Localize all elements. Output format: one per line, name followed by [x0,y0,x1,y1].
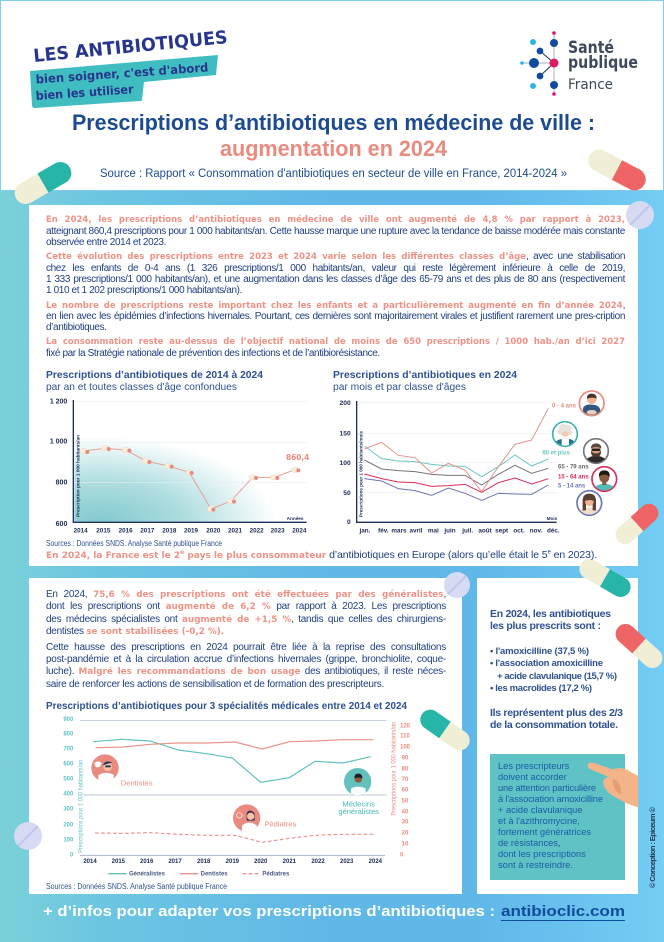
line chart: prescriptions per year: 2016 [119,527,133,534]
line chart: prescriptions by specialty: Pédiatres [262,872,290,878]
line chart: monthly prescriptions by age class: 0 [347,519,351,526]
line chart: prescriptions by specialty: 2021 [283,859,297,865]
chart title: three specialties: Prescriptions d’antibiotiques pour 3 spécialités médicales entre 2014 et 2024 [46,700,407,712]
line chart: prescriptions by specialty: 700 [63,747,74,753]
line chart: prescriptions by specialty: 30 [402,820,409,826]
panel: key figures and charts [29,205,638,566]
pill: sidebar teal [576,555,634,601]
avatar: general practitioner [344,768,371,797]
line chart: prescriptions per year: 600 [56,521,67,528]
line chart: monthly prescriptions by age class: mars [391,527,407,534]
campaign logo: les antibiotiques [30,27,229,108]
line chart: prescriptions by specialty: 800 [63,732,74,738]
line chart: monthly prescriptions by age class: 0 - 4 ans [552,404,577,410]
callout text: de résistances, [498,838,561,848]
icon: pointing hand [588,762,638,807]
line chart: prescriptions by specialty: 0 [70,853,74,859]
text block: key findings: En 2024, les prescriptions d’antibiotiques en médecine de ville ont augmenté de 4,8 % par rapport à 2023, [46,215,625,225]
avatar: pediatrician [233,804,260,833]
sidebar heading: les plus prescrits sont : [490,620,601,632]
line chart: monthly prescriptions by age class: nov. [530,527,543,534]
text block: key findings: observée entre 2014 et 2023. [46,237,166,248]
callout text: une attention particulière [498,783,596,793]
avatar: child 0-4 [579,391,604,417]
line chart: monthly prescriptions by age class: 50 [343,490,351,497]
line chart: prescriptions by specialty: 600 [63,762,74,768]
line chart: monthly prescriptions by age class: 200 [340,400,351,407]
line chart: prescriptions by specialty: 2018 [197,859,211,865]
line chart: prescriptions by specialty: 50 [402,799,409,805]
line chart: prescriptions by specialty: 2017 [168,859,182,865]
avatar: girl 5-14 [577,491,602,516]
line chart: prescriptions per year: Prescription pour 1 000 habitants/an [76,435,82,517]
callout text: à l'association amoxicilline [498,794,603,804]
campaign logo: les antibiotiques: LES ANTIBIOTIQUES [32,27,229,67]
line chart: monthly prescriptions by age class: oct. [513,527,525,534]
line chart: prescriptions by specialty: 100 [63,837,74,843]
line chart: prescriptions by specialty: 500 [63,777,74,783]
line chart: prescriptions by specialty: 2023 [340,859,354,865]
line chart: monthly prescriptions by age class: 100 [340,460,351,467]
chart title: 2014 to 2024: par an et toutes classes d'âge confondues [46,381,237,393]
line chart: prescriptions by specialty: Généralistes [129,872,166,878]
line chart: monthly prescriptions by age class: juil. [461,527,473,534]
logo: Santé publique France: publique [568,53,638,73]
callout text: + acide clavulanique [498,805,583,815]
tablet: top right [620,195,660,235]
sidebar conclusion [490,707,623,731]
line chart: prescriptions per year: 860,4 [286,453,309,462]
chart title: monthly 2024: par mois et par classe d'âges [333,381,466,393]
panel: prescriber callout [490,754,625,880]
text block: key findings: 1 010 et 1 202 prescriptions/1 000 habitants/an). [46,285,242,296]
title: Prescriptions d’antibiotiques en médecine de ville : [72,110,595,135]
line chart: prescriptions per year: 1 200 [50,398,67,405]
line chart: prescriptions per year: 2024 [292,527,307,534]
footer link [43,903,625,920]
line chart: monthly prescriptions by age class: 5 - 14 ans [558,484,586,490]
text block: prescribers [46,589,446,690]
chart title: monthly 2024 [333,369,517,393]
line chart: prescriptions by specialty: 90 [402,756,409,762]
line chart: prescriptions by specialty: Dentistes [201,872,228,878]
text block: key findings: Cette évolution des prescriptions entre 2023 et 2024 varie selon les différentes classes d’âge, avec une stabilisation [46,251,625,262]
line chart: monthly prescriptions by age class: sept [495,527,509,534]
panel: prescribers [29,578,462,894]
source line: Source : Rapport « Consommation d'antibiotiques en secteur de ville en France, 2014-2024 » [100,168,567,180]
footer link: + d’infos pour adapter vos prescriptions d’antibiotiques : [43,903,495,920]
line chart: prescriptions by specialty: 200 [63,822,74,828]
tablet: left side [8,816,48,856]
chart title: monthly 2024: Prescriptions d’antibiotiques en 2024 [333,369,517,381]
line chart: prescriptions by specialty: 60 [402,788,409,794]
text block: key findings: Le nombre de prescriptions reste important chez les enfants et a particulièrement augmenté en fin d’année 2024, [46,300,625,311]
line chart: prescriptions by specialty: 300 [63,807,74,813]
line chart: prescriptions by specialty: Pédiatres [264,820,296,829]
title: augmentation en 2024 [220,136,448,161]
line chart: monthly prescriptions by age class [340,400,589,534]
line chart: monthly prescriptions by age class: août [478,527,493,534]
antibiotics list: • l'amoxicilline (37,5 %) [490,646,589,657]
panel: header [1,1,663,190]
callout text [498,761,603,870]
line chart: prescriptions by specialty: 2022 [311,859,325,865]
line chart: prescriptions per year [50,398,309,534]
line chart: prescriptions per year: 2015 [96,527,111,534]
callout text: doivent accorder [498,772,567,782]
avatar: dentist [91,754,119,783]
line chart: prescriptions by specialty: 0 [400,853,404,859]
logo: Santé publique France: France [568,77,613,93]
line chart: prescriptions per year: 2020 [206,527,221,534]
line chart: prescriptions per year: 800 [56,479,67,486]
line chart: prescriptions per year: 2018 [162,527,177,534]
chart title: 2014 to 2024 [46,369,263,393]
pill: top left [11,158,75,208]
callout text: fortement génératrices [498,827,591,837]
pill: top right [584,146,650,194]
callout text: dont les prescriptions [498,849,586,859]
line chart: prescriptions by specialty: 2019 [226,859,240,865]
text block: key findings [46,214,626,359]
line chart: prescriptions by specialty: 20 [402,831,409,837]
pill: chart teal [416,706,474,754]
line chart: prescriptions per year: 2022 [250,527,264,534]
line chart: prescriptions by specialty [63,717,411,878]
line chart: prescriptions by specialty: 40 [402,810,409,816]
line chart: monthly prescriptions by age class: jan. [359,527,371,534]
line chart: monthly prescriptions by age class: avril [409,527,423,534]
line chart: monthly prescriptions by age class: juin [443,527,456,534]
line chart: prescriptions by specialty: Prescriptions pour 1 000 habitants/an [78,760,84,853]
line chart: prescriptions by specialty: 120 [400,724,411,730]
title [72,110,595,161]
campaign logo: les antibiotiques: bien les utiliser [35,82,134,103]
text block: prescribers: En 2024, 75,6 % des prescriptions ont été effectuées par des généralistes, [46,589,446,600]
pill: sidebar red [612,620,664,672]
line chart: prescriptions by specialty: Médecins [342,800,375,809]
line chart: prescriptions by specialty: 110 [400,734,410,740]
text block: prescribers: dentistes se sont stabilisées (-0,2 %). [46,626,224,637]
line chart: prescriptions by specialty: 2016 [140,859,154,865]
callout text: et à l'azithromycine, [498,816,580,826]
chart title: 2014 to 2024: Prescriptions d’antibiotiques de 2014 à 2024 [46,369,263,381]
line chart: monthly prescriptions by age class: fév. [378,527,389,534]
text block: key findings: fixé par la Stratégie nationale de prévention des infections et de l’antibiorésistance. [46,348,380,359]
line chart: monthly prescriptions by age class: Mois [547,516,558,521]
line chart: prescriptions per year: Années [287,516,304,521]
line chart: monthly prescriptions by age class: 80 et plus [542,451,571,457]
line chart: prescriptions per year: 2019 [184,527,199,534]
text block: prescribers: luche). Malgré les recommandations de bon usage des antibiotiques, il reste néces- [46,666,446,677]
credit: © Conception : Epiceum © [648,807,657,888]
line chart: prescriptions by specialty: 100 [400,745,411,751]
text block: key findings: d’antibiotiques. [46,322,107,333]
text block: key findings: La consommation reste au-dessus de l’objectif national de moins de 650 prescriptions / 1000 hab./an d’ici 2027 [46,337,625,347]
antibiotics list [490,646,617,694]
line chart: prescriptions by specialty: Prescriptions pour 1 000 habitants/an [392,722,398,816]
sidebar conclusion: de la consommation totale. [490,719,618,731]
text block: key findings: 1 333 prescriptions/1 000 habitants/an), et une augmentation dans les classes d’âge des 65-79 ans et des plus de 80 ans (respectivement [46,274,625,285]
sidebar heading [490,608,611,632]
text block: prescribers: des médecins spécialistes ont augmenté de +1,5 %, tandis que celles des chirurgiens- [46,614,446,625]
text block: prescribers: Cette hausse des prescriptions en 2024 pourrait être liée à la reprise des consultations [46,642,446,653]
line chart: monthly prescriptions by age class: 65 - 79 ans [558,465,589,471]
chart source: Sources : Données SNDS. Analyse Santé publique France [46,882,227,891]
campaign logo: les antibiotiques: bien soigner, c'est d'abord [35,60,209,86]
line chart: monthly prescriptions by age class: déc. [547,527,560,534]
text block: key findings: chez les enfants de 0-4 ans (1 326 prescriptions/1 000 habitants/an, valeur qui reste légèrement inférieure à celle de 2019, [46,263,625,274]
avatar: adult 65-79 [584,439,608,464]
line chart: prescriptions per year: 2023 [271,527,285,534]
line chart: prescriptions by specialty: 400 [63,792,74,798]
tablet: panel corner [439,567,475,603]
footer link: antibioclic.com [501,903,625,920]
text block: prescribers: dont les prescriptions ont augmenté de 6,2 % par rapport à 2023. Les prescriptions [46,601,446,612]
text block: prescribers: post-pandémie et à la circulation accrue d’infections hivernales (grippe, bronchiolite, coque- [46,654,446,665]
text block: key findings: atteignant 860,4 prescriptions pour 1 000 habitants/an. Cette hausse marque une rupture avec la tendance de baisse modérée mais constante [46,226,625,237]
pill: middle right [612,500,662,548]
line chart: monthly prescriptions by age class: Prescriptions pour 1 000 habitants/mois [359,431,364,517]
line chart: monthly prescriptions by age class: 150 [340,430,351,437]
line chart: prescriptions per year: 1 000 [50,439,67,446]
logo: Santé publique France: Santé [568,38,614,58]
text block: France ranking: En 2024, la France est le 2e pays le plus consommateur d’antibiotiques en Europe (alors qu’elle était le 5e en 2023). [46,549,597,561]
text block: prescribers: saire de renforcer les actions de sensibilisation et de formation des prescripteurs. [46,679,384,690]
sidebar conclusion: Ils représentent plus des 2/3 [490,707,623,719]
line chart: prescriptions by specialty: 80 [402,766,409,772]
line chart: prescriptions by specialty: 10 [402,842,409,848]
antibiotics list: • les macrolides (17,2 %) [490,683,592,694]
avatar: adult 15-64 [592,467,617,492]
text block: key findings: en lien avec les épidémies d’infections hivernales. Pourtant, ces dernières sont majoritairement virales et justifient rarement une pres-cription [46,311,625,322]
logo: Santé publique France [520,31,638,96]
sidebar heading: En 2024, les antibiotiques [490,608,611,620]
line chart: prescriptions per year: 2014 [74,527,88,534]
line chart: prescriptions by specialty: 2014 [83,859,97,865]
line chart: prescriptions per year: 2021 [228,527,243,534]
line chart: prescriptions by specialty: Dentistes [121,779,153,788]
antibiotics list: + acide clavulanique (15,7 %) [497,671,617,682]
line chart: monthly prescriptions by age class: 15 - 64 ans [558,475,589,481]
callout text: sont à restreindre. [498,860,573,870]
line chart: monthly prescriptions by age class: mai [428,527,439,534]
callout text: Les prescripteurs [498,761,570,771]
line chart: prescriptions by specialty: 2020 [254,859,268,865]
line chart: prescriptions by specialty: généralistes [338,807,379,816]
line chart: prescriptions by specialty: 2015 [112,859,126,865]
line chart: prescriptions by specialty: 900 [63,717,74,723]
panel: most prescribed antibiotics [477,578,638,894]
line chart: prescriptions per year: 2017 [140,527,155,534]
chart source: Sources : Données SNDS. Analyse Santé publique France [46,539,222,548]
line chart: prescriptions by specialty: 2024 [369,859,383,865]
line chart: prescriptions by specialty: 70 [402,777,409,783]
avatar: senior 80+ [553,422,577,447]
antibiotics list: • l'association amoxicilline [490,658,603,669]
